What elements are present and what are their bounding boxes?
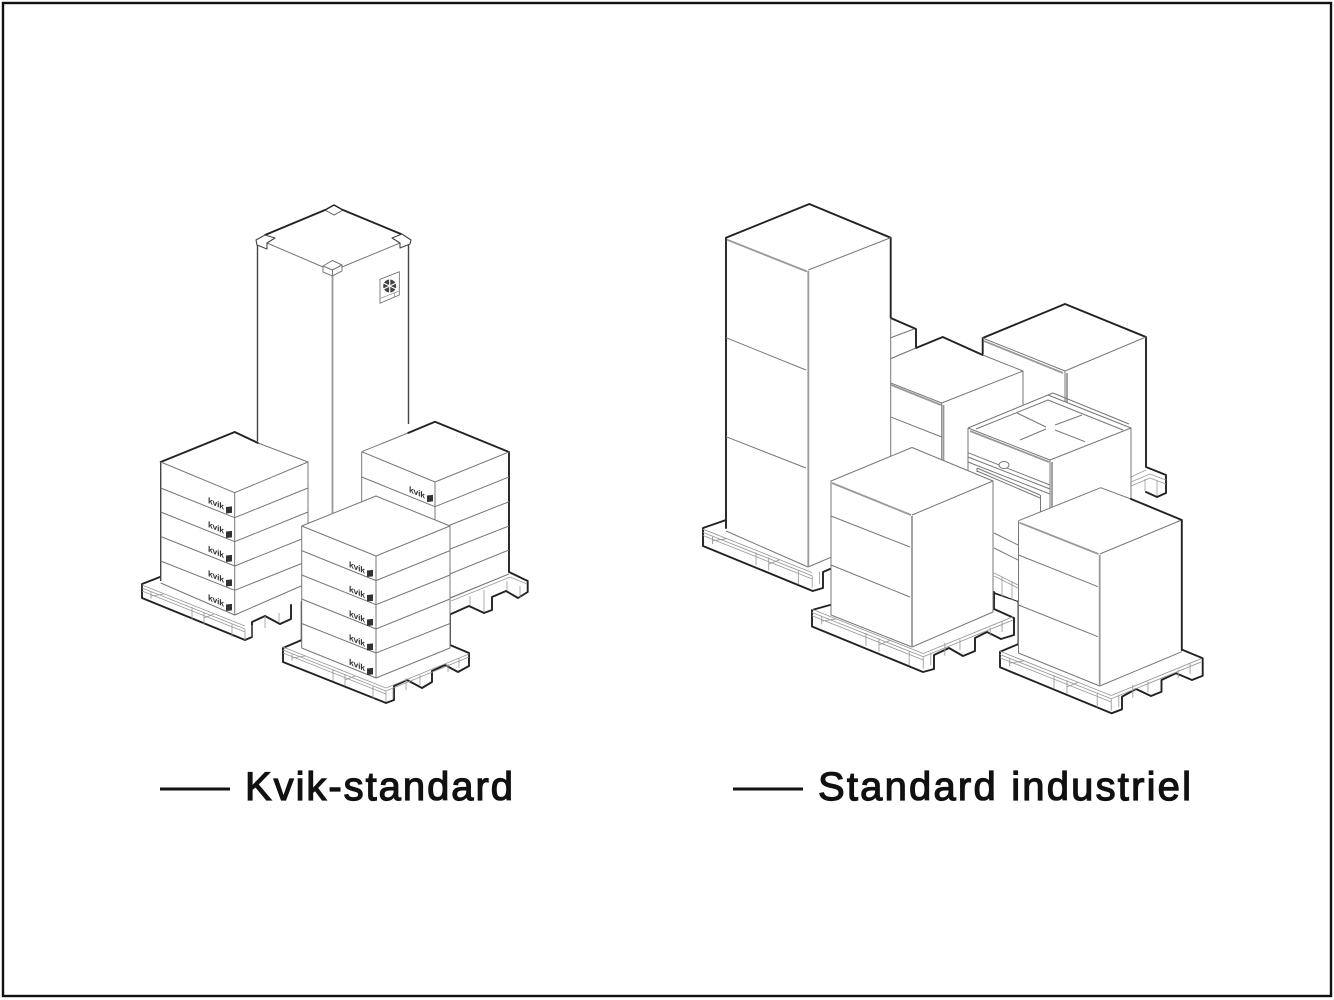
control panel and door (968, 453, 1050, 498)
kvik logos: kvik (349, 608, 365, 625)
pallet (1000, 601, 1203, 713)
tall box with corner protectors and freezer label (256, 205, 411, 520)
kvik logo: kvik (409, 484, 425, 501)
kvik logos: kvik (349, 584, 365, 600)
cooktop burners (1017, 413, 1085, 442)
box behind front pallets (994, 533, 1018, 560)
box (1018, 488, 1182, 686)
panel: Kvik-standard illustration (142, 205, 528, 703)
right pallet and stack (362, 422, 528, 614)
stack of five cartons (161, 432, 308, 615)
kvik logos: kvik (208, 495, 224, 512)
front centre box with pallet (812, 448, 1018, 690)
front right box with pallet (1000, 488, 1203, 713)
kvik logos: kvik (349, 657, 365, 673)
back right box with pallet (983, 304, 1166, 497)
box (831, 448, 993, 647)
small rear box (885, 316, 916, 359)
stack of five cartons (302, 496, 450, 678)
pallet (142, 577, 302, 640)
middle rear box (885, 337, 1023, 470)
tall box (726, 204, 891, 567)
label: Kvik-standard: Kvik-standard (245, 765, 513, 809)
stove (968, 393, 1131, 540)
kvik logos (208, 495, 232, 611)
kvik logos (349, 559, 373, 675)
kvik logos: kvik (208, 568, 224, 585)
left pallet and stack (142, 432, 308, 640)
pallet (812, 592, 1018, 690)
front pallet and stack (283, 496, 469, 703)
pallet (283, 602, 469, 703)
stack of cartons (362, 422, 509, 604)
kvik logos: kvik (208, 592, 224, 609)
kvik logo (409, 484, 433, 502)
icon: freezer label (380, 272, 399, 303)
knob (999, 462, 1009, 468)
tall box with pallet (703, 204, 891, 591)
kvik logos: kvik (349, 632, 365, 649)
stove pallet fragment (985, 550, 1020, 605)
panel: Standard industriel illustration (703, 204, 1203, 713)
kvik logos: kvik (208, 519, 224, 536)
kvik logos: kvik (349, 559, 365, 576)
pallet (703, 520, 840, 591)
kvik logos: kvik (208, 544, 224, 560)
label: Standard industriel: Standard industriel (818, 765, 1191, 809)
pallet (450, 570, 528, 614)
